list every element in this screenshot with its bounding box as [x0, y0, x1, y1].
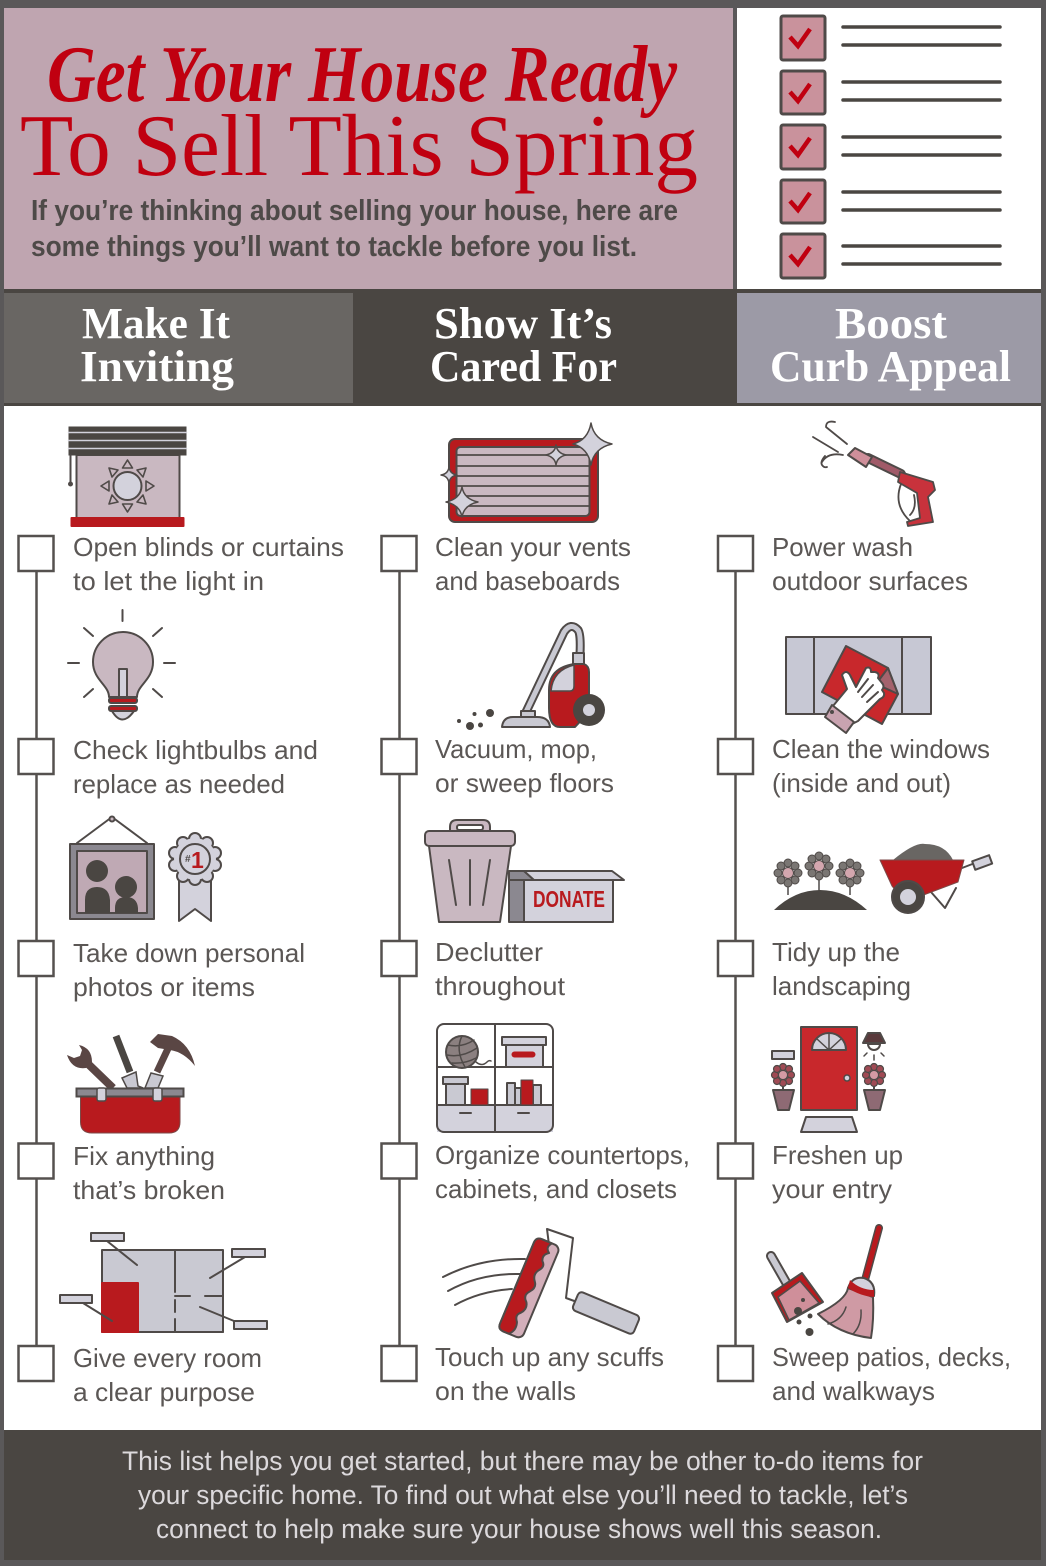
icon: vacuum cleaner	[457, 626, 605, 730]
icon: wheelbarrow	[880, 844, 992, 913]
item: sweep	[718, 1228, 1011, 1406]
panel: checklist illustration	[737, 8, 1041, 289]
checkbox	[718, 739, 753, 774]
subtitle: If you’re thinking about selling your house, here are	[31, 195, 678, 227]
item text: Freshen up	[772, 1140, 903, 1170]
item text: Touch up any scuffs	[435, 1342, 664, 1372]
icon: number one ribbon	[169, 833, 221, 921]
icon: trash can	[425, 820, 515, 922]
footer text: connect to help make sure your house shows well this season.	[156, 1514, 882, 1544]
item: power wash	[718, 422, 968, 596]
subtitle	[31, 195, 678, 263]
item: lightbulbs	[18, 610, 318, 799]
checkbox	[382, 739, 416, 774]
item text: Take down personal	[73, 938, 305, 968]
item text	[772, 532, 968, 596]
footer text: This list helps you get started, but there may be other to-do items for	[122, 1446, 923, 1476]
icon: floor plan	[60, 1233, 267, 1332]
item text: Clean the windows	[772, 734, 990, 764]
heading: make it inviting	[4, 293, 353, 403]
checkbox	[382, 1346, 416, 1381]
heading: boost curb appeal	[737, 293, 1041, 403]
item text	[435, 734, 614, 798]
icon: paint roller	[443, 1229, 640, 1339]
checkbox	[18, 536, 54, 571]
item: entry	[718, 1027, 903, 1204]
item text: cabinets, and closets	[435, 1174, 677, 1204]
icon: number one ribbon: 1	[191, 847, 204, 873]
item text	[435, 1342, 664, 1406]
footer panel	[4, 1430, 1041, 1560]
column: make it inviting	[18, 426, 344, 1407]
item text: Organize countertops,	[435, 1140, 690, 1170]
item text: your entry	[772, 1174, 892, 1204]
item: vacuum	[382, 626, 614, 798]
heading: make it inviting: Inviting	[80, 342, 234, 391]
item text: Give every room	[73, 1343, 262, 1373]
item text	[435, 532, 631, 596]
item text: and walkways	[772, 1376, 935, 1406]
checkbox	[718, 941, 753, 976]
item text: Declutter	[435, 937, 543, 967]
item text	[73, 1343, 262, 1407]
icon: number one ribbon: #	[185, 854, 191, 865]
item: declutter	[382, 820, 624, 1001]
item text	[772, 1140, 903, 1204]
heading: boost curb appeal: Boost	[835, 299, 947, 348]
item text: Fix anything	[73, 1141, 215, 1171]
item: personal photos	[18, 816, 305, 1002]
item text	[73, 532, 344, 596]
icon: power washer	[813, 422, 935, 526]
heading: make it inviting: Make It	[82, 299, 230, 348]
footer text	[122, 1446, 923, 1544]
heading: show it's cared for: Cared For	[430, 342, 617, 391]
column: show it's cared for	[382, 423, 690, 1406]
item text: Open blinds or curtains	[73, 532, 344, 562]
item: organize	[382, 1024, 690, 1204]
item text: Power wash	[772, 532, 913, 562]
title: Get Your House Ready	[47, 31, 677, 119]
checkbox	[382, 941, 416, 976]
panel: checklist body	[4, 406, 1041, 1430]
icon: donate box	[509, 871, 624, 922]
heading: show it's cared for: Show It’s	[434, 299, 612, 348]
icon: framed family photo	[70, 816, 154, 919]
checkbox	[718, 1144, 753, 1178]
item text: Check lightbulbs and	[73, 735, 318, 765]
checkbox	[718, 1346, 753, 1381]
item text: that’s broken	[73, 1175, 225, 1205]
checkbox	[382, 536, 416, 571]
item text: outdoor surfaces	[772, 566, 968, 596]
item text	[435, 937, 566, 1001]
icon: broom	[818, 1228, 879, 1338]
item: vents	[382, 423, 631, 596]
item text	[772, 1342, 1011, 1406]
item text: photos or items	[73, 972, 255, 1002]
subtitle: some things you’ll want to tackle before you list.	[31, 231, 637, 263]
icon: shelving unit	[437, 1024, 553, 1132]
item text: to let the light in	[73, 566, 264, 596]
title: To Sell This Spring	[20, 98, 698, 195]
checkbox	[18, 1346, 54, 1381]
item: fix broken	[18, 1034, 225, 1205]
checkbox	[718, 536, 753, 571]
icon: front door	[772, 1027, 886, 1132]
item text	[435, 1140, 690, 1204]
icon: lightbulb	[68, 610, 175, 720]
item text	[73, 938, 305, 1002]
heading: boost curb appeal: Curb Appeal	[770, 342, 1011, 391]
item: landscaping	[718, 844, 992, 1001]
icon: window blinds with sun	[68, 426, 186, 526]
item text: Vacuum, mop,	[435, 734, 597, 764]
item: touch up	[382, 1229, 664, 1406]
item: open blinds	[18, 426, 344, 596]
icon: dustpan and dust	[771, 1256, 823, 1336]
checkbox	[382, 1144, 416, 1178]
title	[20, 31, 698, 195]
header band	[4, 289, 1041, 406]
icon: cleaning a window	[786, 637, 931, 733]
item text: Tidy up the	[772, 937, 900, 967]
item text: a clear purpose	[73, 1377, 255, 1407]
footer text: your specific home. To find out what else you’ll need to tackle, let’s	[138, 1480, 908, 1510]
item text: landscaping	[772, 971, 911, 1001]
icon: donate box: DONATE	[533, 886, 605, 912]
icon: flower bed	[774, 852, 867, 910]
checkbox	[18, 941, 54, 976]
item text: (inside and out)	[772, 768, 951, 798]
column: boost curb appeal	[718, 422, 1011, 1406]
item text	[73, 735, 318, 799]
item text: Clean your vents	[435, 532, 631, 562]
item text: replace as needed	[73, 769, 285, 799]
icon: toolbox	[67, 1034, 195, 1133]
item text: or sweep floors	[435, 768, 614, 798]
item: clean windows	[718, 637, 990, 798]
heading: show it's cared for	[430, 299, 617, 391]
item: room purpose	[18, 1233, 267, 1407]
title panel	[4, 8, 733, 289]
checkbox	[18, 739, 54, 774]
item text: throughout	[435, 971, 566, 1001]
icon: sparkling vent	[441, 423, 612, 522]
item text: Sweep patios, decks,	[772, 1342, 1011, 1372]
checkbox	[18, 1144, 54, 1178]
item text	[772, 937, 911, 1001]
item text: and baseboards	[435, 566, 620, 596]
item text	[73, 1141, 225, 1205]
item text: on the walls	[435, 1376, 576, 1406]
item text	[772, 734, 990, 798]
